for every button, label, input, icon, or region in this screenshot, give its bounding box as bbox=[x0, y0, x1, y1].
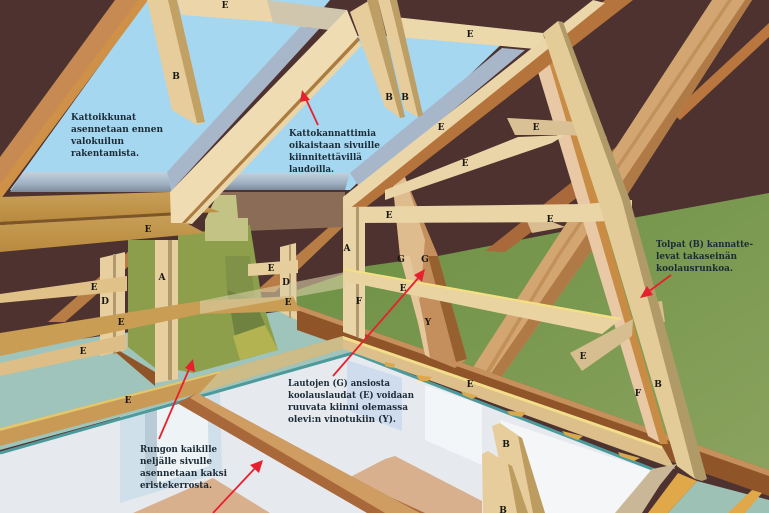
left rafter bbox=[0, 0, 148, 200]
text: roof windows: rakentamista. bbox=[71, 148, 139, 159]
text: posts B: koolausrunkoa. bbox=[656, 263, 733, 274]
arrow: posts B bbox=[640, 275, 671, 298]
roof window glass bbox=[10, 0, 510, 190]
stub E right bbox=[570, 319, 633, 371]
letter labels: E bbox=[547, 215, 554, 225]
text: insulation: eristekerrosta. bbox=[140, 480, 212, 491]
cross header beam in front bbox=[177, 393, 425, 513]
left wall plate bbox=[113, 350, 155, 386]
text: posts B: levat takaseinän bbox=[656, 251, 737, 262]
slanted beam E bbox=[385, 135, 565, 200]
lower room: walls, floor and windows bbox=[0, 353, 665, 513]
rear rafters bbox=[48, 0, 769, 379]
window frame right bbox=[222, 48, 525, 190]
insulation batts bbox=[128, 195, 278, 373]
front beam E left bbox=[0, 336, 343, 446]
small tabs along edge bbox=[385, 362, 640, 461]
short stub E bbox=[507, 118, 607, 138]
text: boards G: Lautojen (G) ansiosta bbox=[288, 378, 390, 389]
text: rafters: oikaistaan sivuille bbox=[289, 140, 380, 151]
post F right bbox=[535, 58, 668, 444]
text: roof windows: asennetaan ennen bbox=[71, 124, 163, 135]
brown tinted area under window bbox=[215, 192, 345, 232]
letter labels: E bbox=[91, 283, 98, 293]
letter labels: E bbox=[125, 396, 132, 406]
lower posts B bbox=[482, 423, 545, 513]
rear wall plate bbox=[297, 305, 769, 496]
letter labels: B bbox=[502, 440, 510, 450]
letter labels: A bbox=[343, 244, 352, 254]
letter labels: E bbox=[268, 264, 275, 274]
long beam E right bbox=[343, 268, 622, 334]
text: posts B: Tolpat (B) kannatte- bbox=[656, 239, 753, 250]
post A bbox=[155, 240, 178, 383]
letter labels: D bbox=[101, 297, 109, 307]
letter labels: Y bbox=[424, 318, 432, 328]
text: boards G: olevi:n vinotukiin (Y). bbox=[288, 414, 396, 425]
text: boards G: ruuvata kiinni olemassa bbox=[288, 402, 408, 413]
posts B B top bbox=[350, 0, 423, 118]
beams E left side bbox=[0, 260, 345, 376]
horizontal beam E right bbox=[343, 200, 632, 233]
letter labels: E bbox=[580, 352, 587, 362]
beam Y with boards G bbox=[392, 177, 467, 368]
letter labels bbox=[80, 1, 662, 513]
letter labels: B bbox=[385, 93, 393, 103]
post D right bbox=[280, 243, 297, 320]
letter labels: E bbox=[462, 159, 469, 169]
text: insulation: asennetaan kaksi bbox=[140, 468, 227, 479]
text: rafters: laudoilla. bbox=[289, 164, 334, 175]
large window frame left bbox=[10, 27, 320, 192]
letter labels: F bbox=[635, 389, 642, 399]
letter labels: E bbox=[386, 211, 393, 221]
text: roof windows: valokuilun bbox=[70, 136, 124, 147]
text: rafters: Kattokannattimia bbox=[289, 128, 376, 139]
top beam E bbox=[177, 0, 353, 33]
letter labels: G bbox=[397, 255, 405, 265]
post B top left bbox=[147, 0, 205, 125]
teal floor boards bbox=[0, 310, 353, 450]
letter labels: E bbox=[222, 1, 229, 11]
small stub behind post bbox=[655, 301, 665, 322]
letter labels: G bbox=[421, 255, 429, 265]
top right beam E bbox=[395, 17, 547, 50]
letter labels: B bbox=[401, 93, 409, 103]
text: boards G: koolauslaudat (E) voidaan bbox=[288, 390, 414, 401]
central trimmer beam bbox=[170, 10, 362, 224]
lower big beams E bbox=[0, 192, 220, 252]
letter labels: D bbox=[282, 278, 290, 288]
letter labels: E bbox=[467, 30, 474, 40]
letter labels: A bbox=[158, 273, 167, 283]
letter labels: E bbox=[533, 123, 540, 133]
letter labels: B bbox=[172, 72, 180, 82]
long trimmer beam right bbox=[343, 0, 633, 225]
letter labels: E bbox=[467, 380, 474, 390]
bottom right floor pieces bbox=[615, 464, 769, 513]
post D left bbox=[100, 252, 125, 356]
arrow: trimmer beam bbox=[300, 90, 318, 125]
main post B right bbox=[543, 21, 707, 481]
text: rafters: kiinnitettävillä bbox=[289, 152, 362, 163]
text: insulation: neljälle sivulle bbox=[140, 456, 212, 467]
arrow: header beam bbox=[213, 460, 263, 513]
letter labels: B bbox=[654, 380, 662, 390]
letter labels: E bbox=[285, 298, 292, 308]
front beam E right bbox=[343, 336, 675, 469]
green roof insulation bbox=[297, 193, 769, 480]
teal edge line bbox=[0, 353, 665, 474]
letter labels: E bbox=[438, 123, 445, 133]
letter labels: E bbox=[145, 225, 152, 235]
letter labels: F bbox=[356, 297, 363, 307]
text: insulation: Rungon kaikille bbox=[140, 444, 217, 455]
letter labels: E bbox=[80, 347, 87, 357]
arrow: boards G bbox=[333, 269, 425, 376]
letter labels: E bbox=[118, 318, 125, 328]
post F centre bbox=[343, 207, 365, 340]
letter labels: E bbox=[400, 284, 407, 294]
text: roof windows: Kattoikkunat bbox=[71, 112, 137, 123]
arrow: insulation bbox=[159, 359, 195, 439]
